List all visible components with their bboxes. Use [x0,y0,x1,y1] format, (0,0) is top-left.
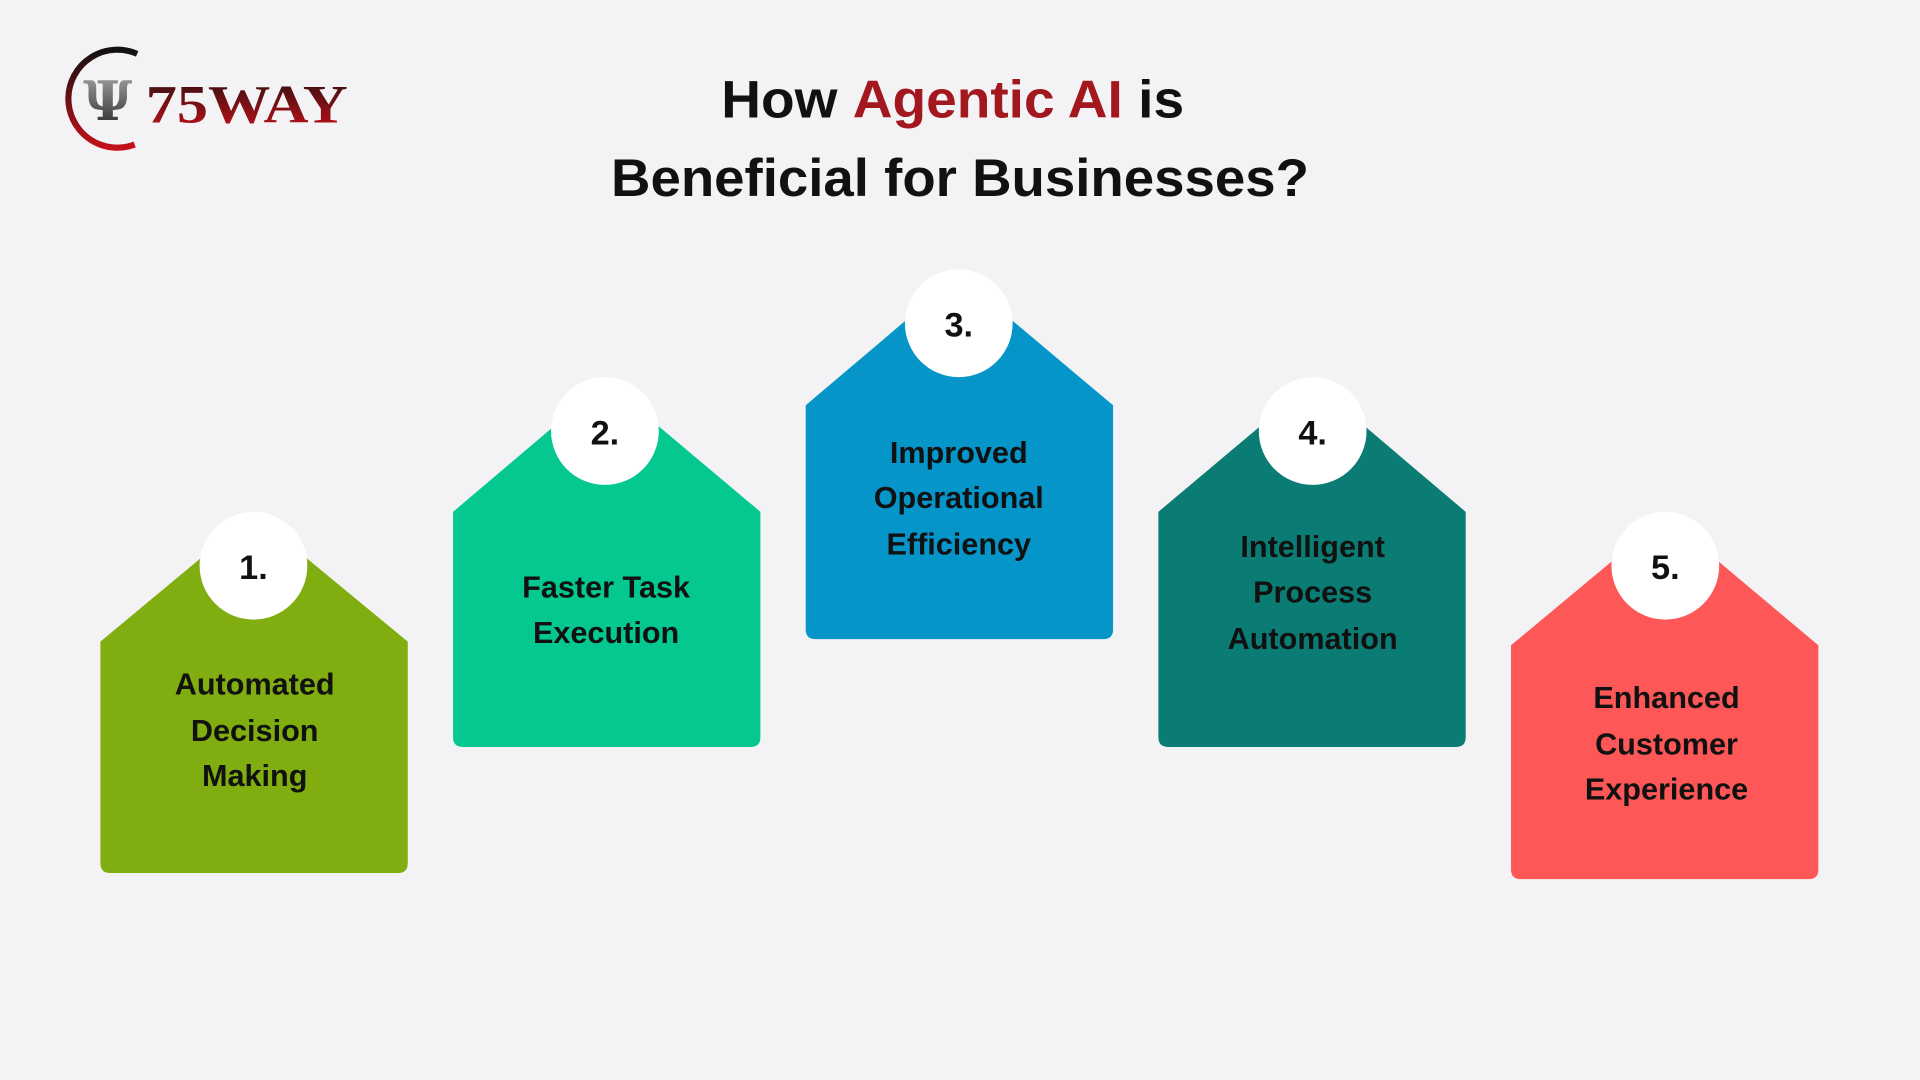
card 3: Operational [874,481,1044,515]
logo: Ψ [83,69,132,133]
card 2: Faster Task [522,571,691,605]
title: Beneficial for Businesses? [611,149,1309,208]
card 4: 4. [1298,414,1327,452]
card 2: Execution [533,616,679,650]
card 5: 5. [1651,549,1680,587]
card 5: Customer [1595,727,1738,761]
card 5: Experience [1585,773,1748,807]
card 3: 3. [944,307,973,345]
title: How Agentic AI is [721,71,1184,130]
logo [68,50,348,148]
card 3 [806,269,1113,639]
card 2 [453,377,760,747]
card 4: Intelligent [1240,530,1385,564]
card 4: Process [1253,575,1372,609]
card 4: Automation [1228,622,1398,656]
card 1: 1. [239,549,268,587]
card 3: Improved [890,436,1028,470]
card 2: 2. [591,414,619,452]
card 1 [100,512,408,873]
card 1: Decision [191,714,318,748]
title [611,71,1309,208]
card 5 [1511,512,1818,879]
card 1: Making [202,759,307,793]
logo: 75WAY [146,74,348,134]
card 4 [1158,377,1466,747]
card 1: Automated [175,667,335,701]
card 3: Efficiency [886,528,1031,562]
card 5: Enhanced [1593,681,1740,715]
